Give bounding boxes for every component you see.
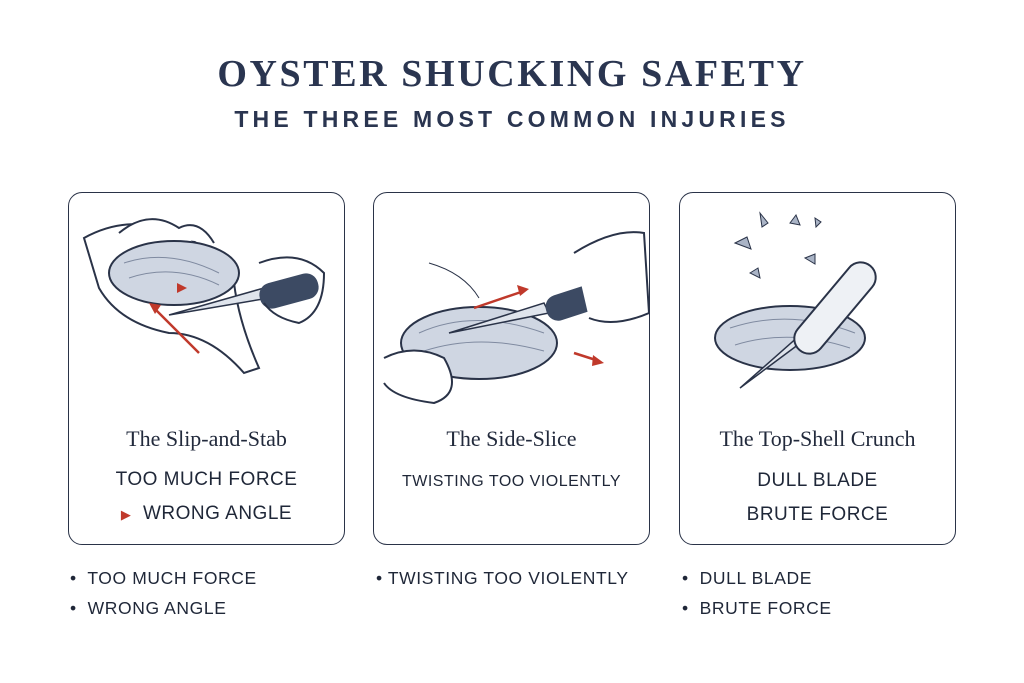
text: causes: DULL BLADE	[757, 470, 878, 491]
heading: The Slip-and-Stab	[126, 426, 287, 451]
bullets: panel 3: • DULL BLADE	[682, 568, 812, 588]
panel: slip-and-stab: ▶ WRONG ANGLE	[121, 503, 292, 524]
illustration: crunching shell	[714, 211, 877, 389]
heading: The Side-Slice	[446, 426, 577, 451]
illustration: oyster and twisting knife	[383, 231, 649, 404]
panel: top-shell crunch: BRUTE FORCE	[747, 504, 888, 525]
text: cause: TWISTING TOO VIOLENTLY	[402, 473, 621, 490]
text: causes: TOO MUCH FORCE	[116, 469, 297, 490]
bullets: panel 2: • TWISTING TOO VIOLENTLY	[376, 568, 629, 588]
bullets: panel 1: • WRONG ANGLE	[70, 598, 226, 618]
panel: side-slice	[373, 192, 650, 545]
bullets: panel 1	[70, 568, 257, 618]
bullets: panel 1: • TOO MUCH FORCE	[70, 568, 257, 588]
illustration: hand and knife slip	[82, 218, 325, 374]
panel: top-shell crunch	[679, 192, 956, 545]
bullets: panel 3	[682, 568, 832, 618]
subtitle: THE THREE MOST COMMON INJURIES	[234, 106, 790, 132]
title: OYSTER SHUCKING SAFETY	[217, 53, 807, 95]
panel: slip-and-stab	[68, 192, 345, 545]
bullets: panel 3: • BRUTE FORCE	[682, 598, 832, 618]
heading: The Top-Shell Crunch	[719, 426, 916, 451]
